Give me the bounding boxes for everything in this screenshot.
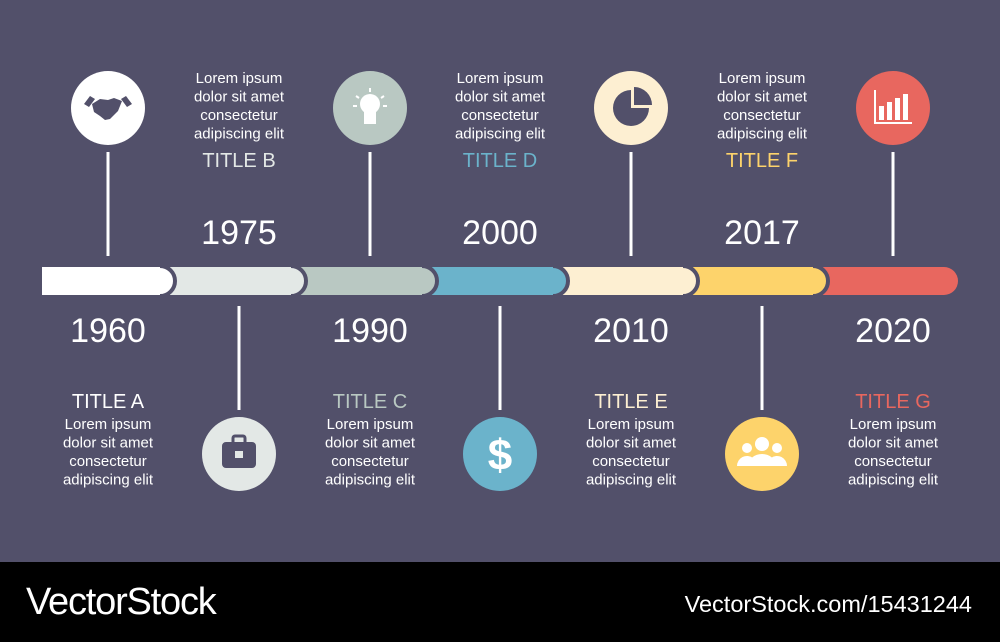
descriptions: Lorem ipsum xyxy=(457,70,543,87)
icon: chart xyxy=(856,71,930,145)
years: 1960 xyxy=(70,312,146,350)
descriptions: dolor sit amet xyxy=(63,434,154,452)
descriptions: Lorem ipsum xyxy=(196,70,282,87)
years: 2017 xyxy=(724,214,800,252)
footer bar: VectorStock xyxy=(26,581,218,623)
years: 1990 xyxy=(332,312,408,350)
descriptions: Lorem ipsum xyxy=(65,416,151,433)
icon: people xyxy=(725,417,799,491)
icon: pie xyxy=(594,71,668,145)
descriptions: adipiscing elit xyxy=(63,472,154,488)
descriptions: consectetur xyxy=(592,453,670,470)
descriptions: consectetur xyxy=(200,107,278,124)
descriptions: dolor sit amet xyxy=(848,434,939,452)
titles: TITLE A xyxy=(72,391,145,413)
descriptions: adipiscing elit xyxy=(194,126,285,142)
icon: dollar xyxy=(463,417,537,491)
descriptions: adipiscing elit xyxy=(848,472,939,488)
descriptions: Lorem ipsum xyxy=(327,416,413,433)
titles: TITLE C xyxy=(333,391,407,413)
years: 2010 xyxy=(593,312,669,350)
descriptions: consectetur xyxy=(461,107,539,124)
years: 1975 xyxy=(201,214,277,252)
descriptions: Lorem ipsum xyxy=(850,416,936,433)
descriptions: Lorem ipsum xyxy=(588,416,674,433)
descriptions: dolor sit amet xyxy=(325,434,416,452)
descriptions: Lorem ipsum xyxy=(719,70,805,87)
years: 2000 xyxy=(462,214,538,252)
descriptions xyxy=(63,70,939,488)
descriptions: adipiscing elit xyxy=(325,472,416,488)
icon: handshake xyxy=(71,71,145,145)
titles: TITLE D xyxy=(463,150,537,172)
descriptions: dolor sit amet xyxy=(455,88,546,106)
titles: TITLE B xyxy=(202,150,276,172)
footer bar xyxy=(0,562,1000,642)
descriptions: consectetur xyxy=(854,453,932,470)
titles: TITLE E xyxy=(594,391,668,413)
timeline bar xyxy=(42,266,958,296)
descriptions: dolor sit amet xyxy=(586,434,677,452)
titles: TITLE G xyxy=(855,391,931,413)
years: 2020 xyxy=(855,312,931,350)
descriptions: adipiscing elit xyxy=(455,126,546,142)
titles xyxy=(72,150,931,413)
descriptions: dolor sit amet xyxy=(194,88,285,106)
icon: bulb xyxy=(333,71,407,145)
descriptions: consectetur xyxy=(69,453,147,470)
years xyxy=(70,214,931,350)
descriptions: adipiscing elit xyxy=(717,126,808,142)
descriptions: dolor sit amet xyxy=(717,88,808,106)
connectors xyxy=(108,152,893,410)
descriptions: consectetur xyxy=(331,453,409,470)
icon: dollar: $ xyxy=(488,431,512,480)
descriptions: adipiscing elit xyxy=(586,472,677,488)
titles: TITLE F xyxy=(726,150,798,172)
icon: briefcase xyxy=(202,417,276,491)
footer bar: VectorStock.com/15431244 xyxy=(685,591,972,617)
descriptions: consectetur xyxy=(723,107,801,124)
